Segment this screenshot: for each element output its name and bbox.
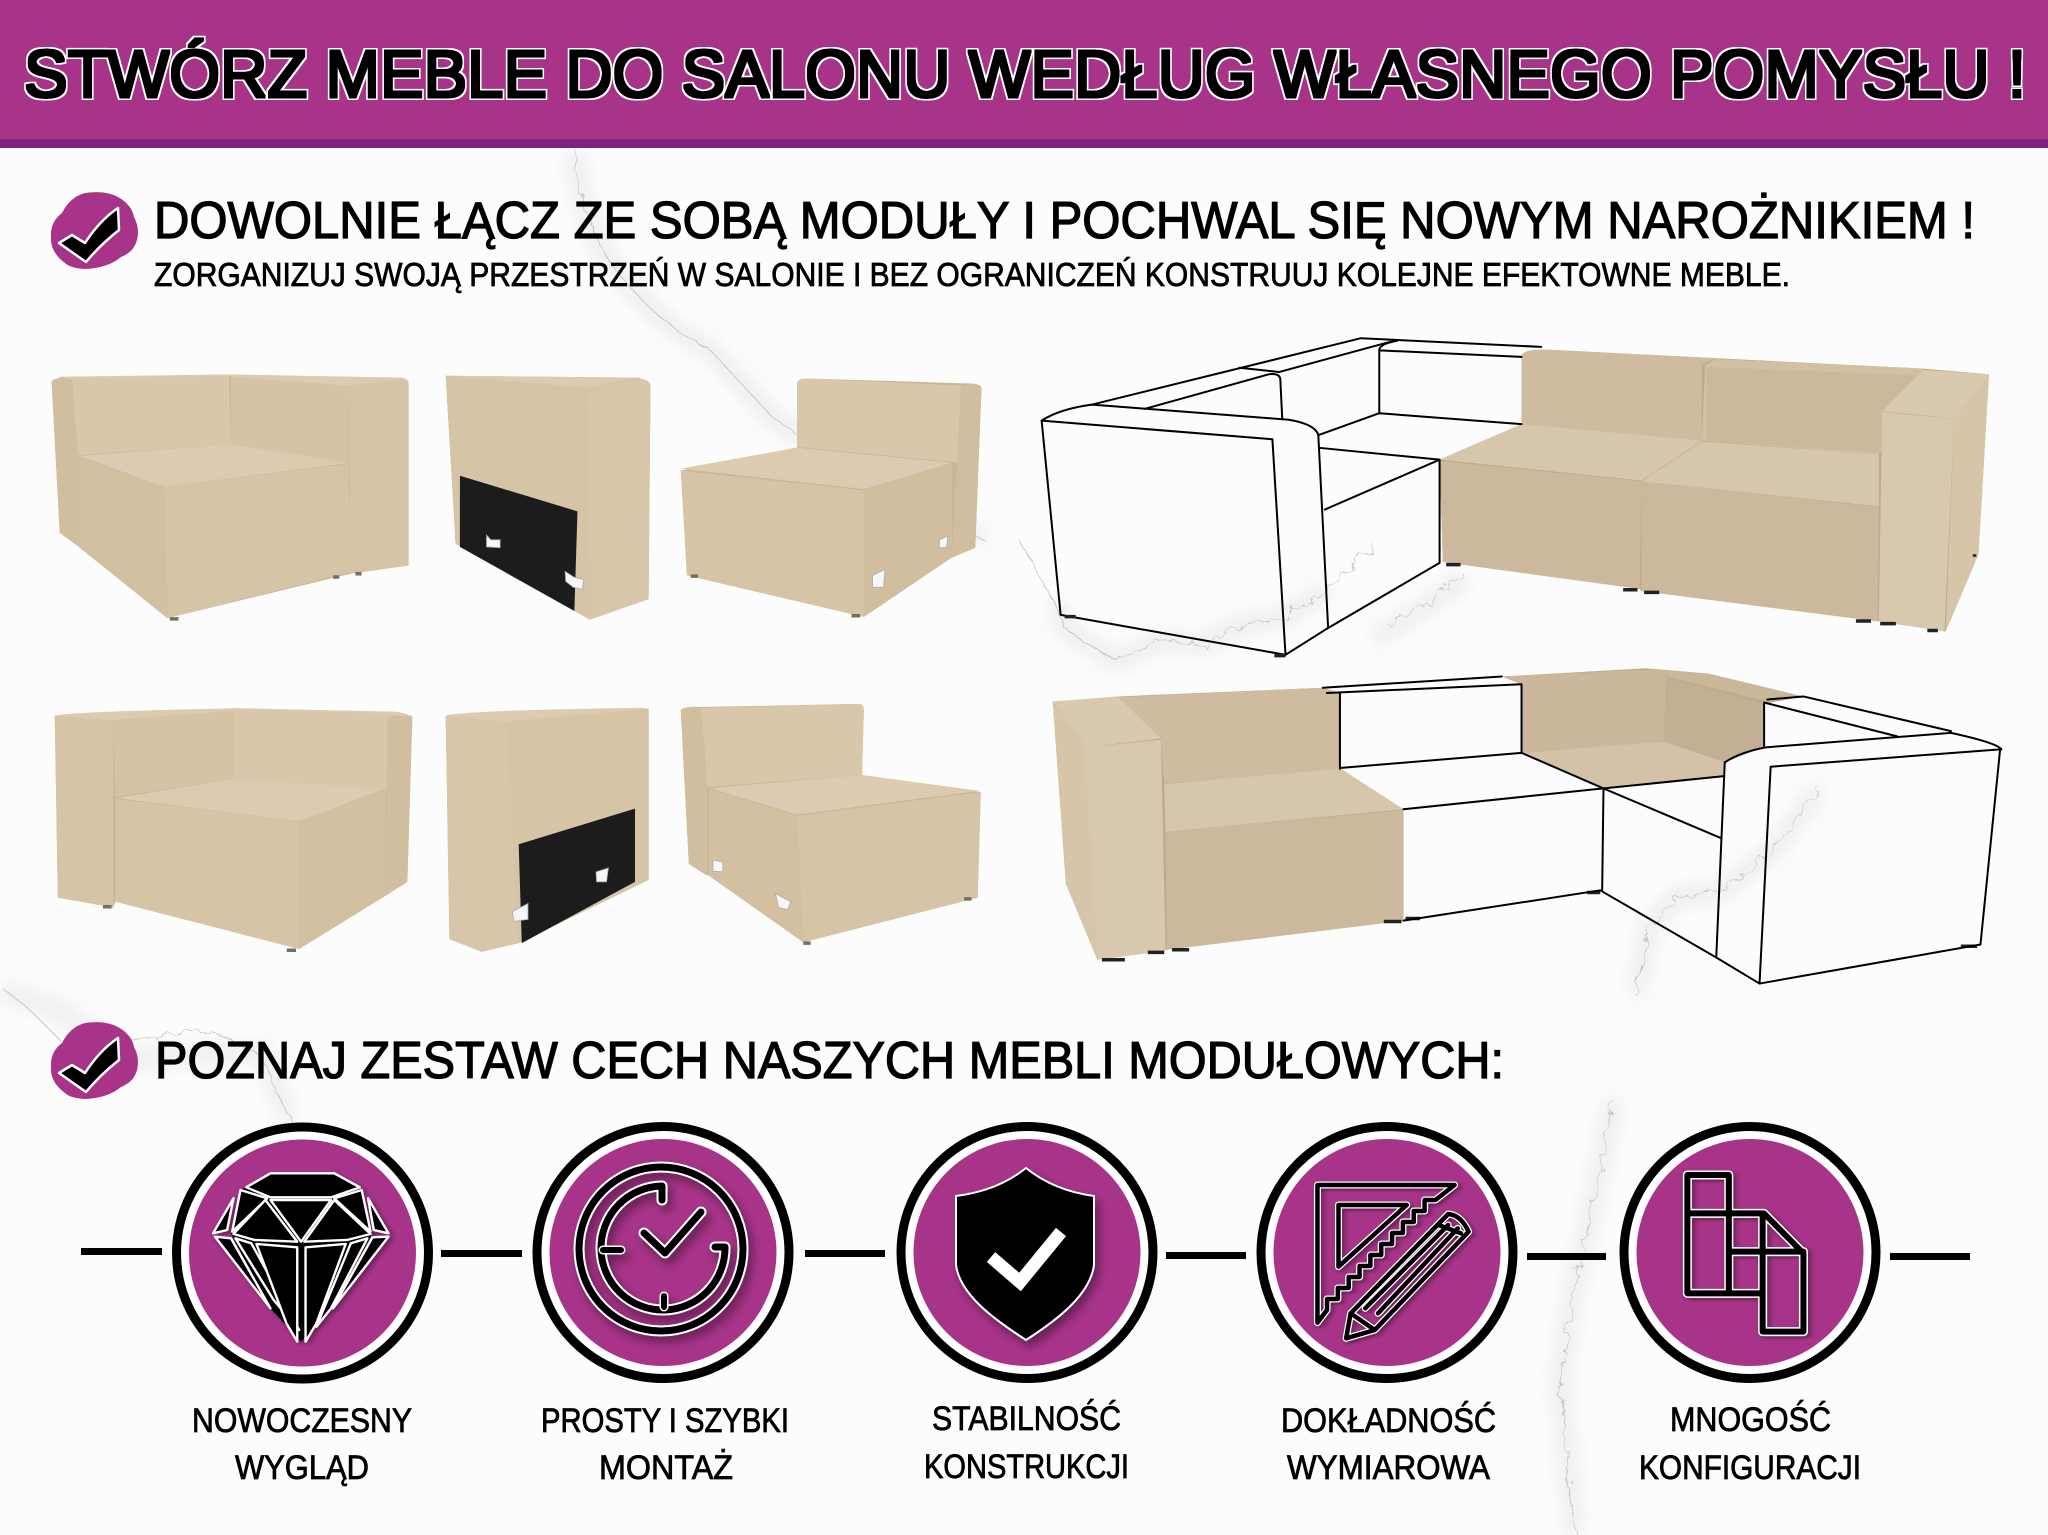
feature label: stabilność konstrukcji: STABILNOŚĆ [932,1399,1121,1438]
armchair 1: front view left [52,375,409,619]
feature label: stabilność konstrukcji: KONSTRUKCJI [924,1448,1129,1486]
section 2 badge: check mark [51,1022,138,1099]
feature label: dokładność wymiarowa: WYMIAROWA [1287,1449,1490,1487]
feature label: mnogość konfiguracji [1639,1400,1861,1487]
feature label: nowoczesny wygląd: NOWOCZESNY [192,1402,412,1440]
armchair 4: front view right [55,708,412,950]
armchair 3: side view right arm [681,378,982,617]
icon: diamond badge [176,1127,428,1379]
black panel [519,809,635,943]
feature label: mnogość konfiguracji: MNOGOŚĆ [1670,1400,1831,1439]
feature label: dokładność wymiarowa [1281,1401,1496,1487]
header banner [0,0,2048,148]
armchair 5: back view with black panel [446,708,649,952]
feature label: prosty i szybki montaż: PROSTY I SZYBKI [541,1402,789,1440]
feature label: stabilność konstrukcji [924,1399,1129,1486]
feature label: nowoczesny wygląd [192,1402,412,1487]
section 2 heading: POZNAJ ZESTAW CECH NASZYCH MEBLI MODUŁOWYCH: [155,1032,1504,1090]
black panel [460,476,577,611]
outlined modules [1760,749,2000,984]
section 1 subheading: ZORGANIZUJ SWOJĄ PRZESTRZEŃ W SALONIE I BEZ OGRANICZEŃ KONSTRUUJ KOLEJNE EFEKTOWNE MEBLE. [154,256,1790,293]
icon: clock badge [537,1126,789,1378]
feature label: prosty i szybki montaż [541,1402,789,1487]
beige modules [1440,349,1989,631]
icon: modular layout badge [1624,1126,1876,1378]
beige modules [1053,668,1977,960]
section 1 heading: DOWOLNIE ŁĄCZ ZE SOBĄ MODUŁY I POCHWAL SIĘ NOWYM NAROŻNIKIEM ! [154,192,1975,250]
armchair 2: back view with black panel [446,376,650,620]
feature label: prosty i szybki montaż: MONTAŻ [599,1449,733,1487]
section 1 badge: check mark [51,192,138,269]
feature label: nowoczesny wygląd: WYGLĄD [235,1449,369,1487]
icon: shield badge [901,1126,1153,1378]
connector lines [81,1248,1970,1260]
corner sofa A: outlined modules and beige modules [1042,338,1989,656]
icon: ruler and pencil badge [1261,1126,1513,1378]
feature label: mnogość konfiguracji: KONFIGURACJI [1639,1449,1861,1487]
corner sofa B: outlined modules and beige modules [1053,668,2001,984]
title: STWÓRZ MEBLE DO SALONU WEDŁUG WŁASNEGO POMYSŁU ! [24,37,2026,112]
feature label: dokładność wymiarowa: DOKŁADNOŚĆ [1281,1401,1496,1440]
armchair 6: side view left arm [681,704,981,943]
outlined modules [1042,421,1286,655]
